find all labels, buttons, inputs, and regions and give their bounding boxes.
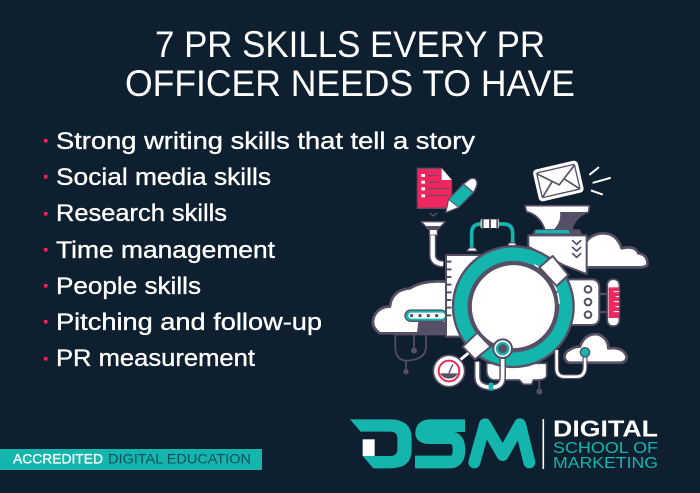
title: OFFICER NEEDS TO HAVE	[125, 63, 575, 104]
skill 3: Research skills	[56, 200, 227, 227]
logo wordmark: SCHOOL OF	[553, 440, 658, 457]
logo wordmark: MARKETING	[553, 455, 658, 472]
skills list	[44, 128, 476, 372]
small funnel	[421, 213, 445, 264]
machine body	[446, 255, 608, 337]
DSM logo	[350, 416, 658, 472]
base under ring	[487, 363, 547, 395]
icon: pencil	[446, 178, 477, 212]
wires under left cloud	[395, 335, 426, 374]
cloud: left	[373, 281, 447, 333]
accreditation banner: ACCREDITED	[13, 451, 103, 467]
cloud: upper right	[585, 233, 647, 267]
title	[125, 24, 575, 104]
stethoscope tubes	[477, 339, 512, 391]
logo wordmark	[553, 416, 658, 472]
cloud: lower right	[565, 334, 627, 363]
skill 2: Social media skills	[56, 164, 271, 191]
skill 5: People skills	[56, 273, 201, 300]
logo wordmark: DIGITAL	[553, 416, 658, 442]
accreditation banner: DIGITAL EDUCATION	[108, 451, 251, 467]
tube to lower cloud	[557, 348, 590, 377]
accreditation banner	[0, 449, 262, 470]
central ring	[453, 246, 574, 367]
conveyor	[405, 310, 447, 321]
title: 7 PR SKILLS EVERY PR	[155, 24, 545, 65]
skill 1: Strong writing skills that tell a story	[56, 128, 476, 155]
hopper and tower	[525, 206, 589, 274]
logo mark	[350, 419, 529, 468]
handle pipe	[467, 219, 517, 251]
signal dashes	[590, 168, 610, 194]
icon: document	[417, 168, 452, 208]
ring clamp: upper right	[539, 256, 568, 286]
gauge: red ruler	[607, 279, 619, 326]
machine illustration	[373, 162, 647, 395]
icon: envelope	[534, 162, 583, 200]
ring clamp: lower left	[463, 333, 491, 359]
gauge dial	[433, 354, 467, 387]
skill 6: Pitching and follow-up	[56, 309, 322, 336]
skill 4: Time management	[56, 237, 275, 264]
skill 7: PR measurement	[56, 345, 255, 372]
logo divider	[542, 419, 544, 469]
